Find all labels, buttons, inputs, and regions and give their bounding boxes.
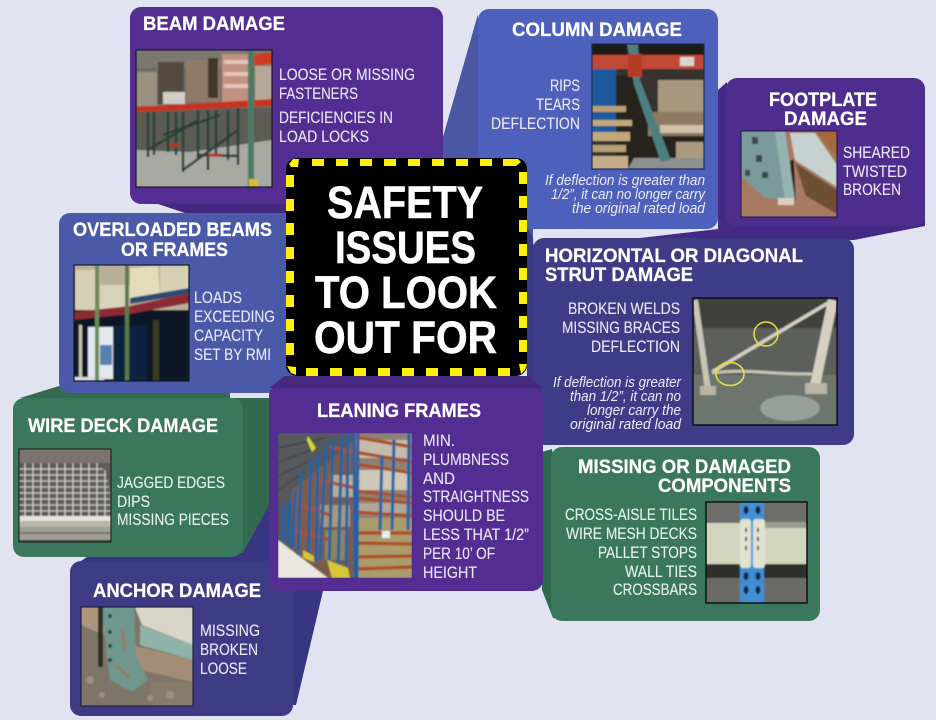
text: leaning frames list: PER 10’ OF — [423, 545, 495, 563]
text: footplate damage list: TWISTED — [843, 163, 907, 181]
heading: overloaded beams: OVERLOADED BEAMS — [73, 219, 272, 241]
text: overloaded list: EXCEEDING — [194, 308, 275, 326]
heading: missing components: MISSING OR DAMAGED — [578, 456, 791, 478]
text: beam damage list — [279, 66, 415, 146]
text: column damage list: TEARS — [536, 96, 580, 114]
photo: bent struts with circled damage — [693, 298, 837, 425]
photo: sheared footplate — [741, 131, 837, 217]
photo: rusted anchor — [81, 607, 193, 706]
panel: horizontal or diagonal strut damage — [533, 238, 854, 445]
heading: column damage: COLUMN DAMAGE — [512, 19, 682, 41]
heading: footplate damage — [769, 89, 877, 130]
heading: beam damage: BEAM DAMAGE — [143, 13, 285, 35]
text: leaning frames list — [423, 432, 529, 582]
text: overloaded list: CAPACITY — [194, 327, 263, 345]
text: components list: WALL TIES — [625, 563, 697, 581]
note: strut deflection — [553, 375, 682, 433]
heading: footplate damage: FOOTPLATE — [769, 89, 877, 111]
text: components list: CROSS-AISLE TILES — [565, 506, 697, 524]
panel: footplate damage — [726, 78, 925, 226]
panel: anchor damage — [70, 561, 293, 716]
text: leaning frames list: HEIGHT — [423, 564, 477, 582]
text: column damage list: DEFLECTION — [491, 115, 580, 133]
hazard stripe border — [286, 159, 527, 376]
text: strut damage list: MISSING BRACES — [562, 319, 680, 337]
photo: torn column — [592, 44, 704, 169]
text: components list — [565, 506, 697, 599]
text: column damage list — [491, 77, 580, 133]
heading: missing components — [578, 456, 791, 497]
text: footplate damage list: BROKEN — [843, 181, 901, 199]
text: leaning frames list: STRAIGHTNESS — [423, 488, 529, 506]
text: anchor damage list: BROKEN — [200, 641, 258, 659]
photo: leaning warehouse frames — [278, 433, 412, 578]
panel: leaning frames — [269, 387, 543, 591]
photo: overloaded rack — [74, 265, 189, 381]
title: safety issues to look out for: TO LOOK — [315, 267, 497, 318]
note: strut deflection: than 1/2”, it can no — [570, 389, 681, 405]
text: strut damage list: DEFLECTION — [591, 338, 680, 356]
text: leaning frames list: LESS THAT 1/2” — [423, 526, 529, 544]
panel: central safety title sign — [286, 158, 527, 376]
text: wire deck list: JAGGED EDGES — [117, 474, 225, 492]
heading: footplate damage: DAMAGE — [784, 108, 867, 130]
text: beam damage list: DEFICIENCIES IN — [279, 109, 393, 127]
text: overloaded list — [194, 289, 275, 364]
text: overloaded list: SET BY RMI — [194, 346, 271, 364]
icon: yellow damage circle upper — [754, 322, 778, 346]
heading: anchor damage: ANCHOR DAMAGE — [93, 580, 261, 602]
note: column deflection: If deflection is greater than — [545, 173, 705, 189]
text: footplate damage list: SHEARED — [843, 144, 910, 162]
panel: missing or damaged components — [551, 447, 820, 621]
text: beam damage list: FASTENERS — [279, 85, 358, 103]
text: overloaded list: LOADS — [194, 289, 242, 307]
text: strut damage list — [562, 300, 680, 356]
text: anchor damage list: MISSING — [200, 622, 260, 640]
text: leaning frames list: PLUMBNESS — [423, 451, 509, 469]
heading: strut damage — [545, 245, 803, 286]
heading: leaning frames: LEANING FRAMES — [317, 400, 481, 422]
text: beam damage list: LOOSE OR MISSING — [279, 66, 415, 84]
panel: column damage — [478, 9, 718, 229]
text: wire deck list: DIPS — [117, 493, 150, 511]
text: anchor damage list: LOOSE — [200, 660, 247, 678]
text: wire deck list: MISSING PIECES — [117, 511, 229, 529]
text: wire deck list — [117, 474, 229, 529]
note: column deflection — [545, 173, 706, 217]
heading: strut damage: STRUT DAMAGE — [545, 264, 693, 286]
panel: overloaded beams or frames — [59, 213, 299, 393]
text: components list: PALLET STOPS — [598, 544, 697, 562]
title: safety issues to look out for: SAFETY — [327, 177, 483, 228]
heading: overloaded beams — [73, 219, 272, 261]
text: components list: WIRE MESH DECKS — [566, 525, 697, 543]
photo: warehouse racks with red beam — [136, 50, 272, 187]
text: strut damage list: BROKEN WELDS — [568, 300, 680, 318]
heading: strut damage: HORIZONTAL OR DIAGONAL — [545, 245, 803, 267]
note: column deflection: the original rated load — [572, 201, 706, 217]
note: strut deflection: original rated load — [570, 417, 682, 433]
title: safety issues to look out for: OUT FOR — [314, 312, 497, 363]
text: leaning frames list: SHOULD BE — [423, 507, 505, 525]
text: anchor damage list — [200, 622, 260, 678]
title: safety issues to look out for — [314, 177, 497, 363]
text: column damage list: RIPS — [550, 77, 580, 95]
note: column deflection: 1/2”, it can no longer carry — [551, 187, 706, 203]
text: components list: CROSSBARS — [613, 581, 697, 599]
heading: missing components: COMPONENTS — [658, 475, 791, 497]
text: leaning frames list: MIN. — [423, 432, 455, 450]
text: footplate damage list — [843, 144, 910, 199]
photo: blue uprights and beam bracket — [706, 502, 807, 603]
photo: wire mesh deck — [19, 449, 111, 542]
title: safety issues to look out for: ISSUES — [335, 222, 476, 273]
note: strut deflection: If deflection is greater — [553, 375, 682, 391]
icon: yellow damage circle lower — [716, 362, 744, 386]
note: strut deflection: longer carry the — [587, 403, 681, 419]
heading: wire deck damage: WIRE DECK DAMAGE — [28, 415, 218, 437]
heading: overloaded beams: OR FRAMES — [121, 239, 228, 261]
text: beam damage list: LOAD LOCKS — [279, 128, 369, 146]
panel: beam damage — [130, 7, 443, 204]
text: leaning frames list: AND — [423, 470, 455, 488]
panel: wire deck damage — [13, 398, 243, 557]
